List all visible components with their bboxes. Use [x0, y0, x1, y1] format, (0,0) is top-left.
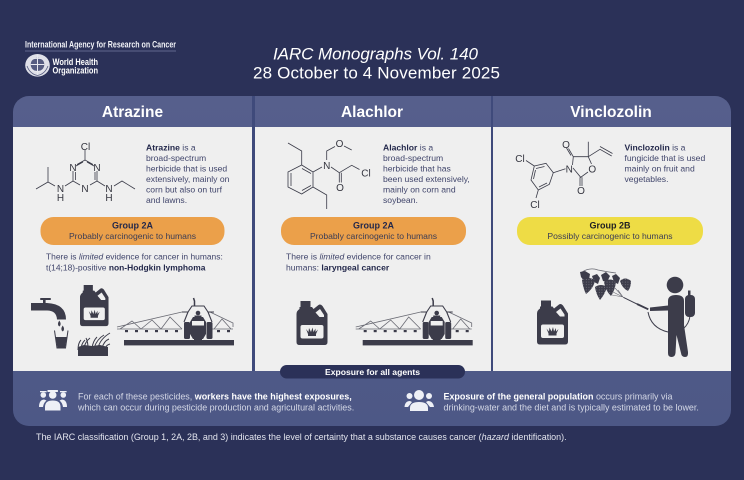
- icon: person spraying: [623, 277, 695, 357]
- heading: Atrazine: Atrazine: [102, 104, 163, 121]
- heading: Alachlor: Alachlor: [341, 104, 403, 121]
- chemical structure: Vinclozolin: O: [562, 140, 570, 151]
- text: Alachlor description: soybean.: [383, 195, 418, 205]
- text: Atrazine description: Atrazine is a: [146, 142, 196, 152]
- icon: tractor sprayer: [356, 298, 473, 345]
- text: Atrazine description: and lawns.: [146, 195, 187, 205]
- chemical structure: Vinclozolin: O: [577, 186, 585, 197]
- text: general population exposure: Exposure of the general population occurs primarily via: [444, 392, 672, 402]
- title: IARC Monographs Vol. 140: [273, 44, 479, 64]
- text: Atrazine description: corn but also on turf: [146, 184, 223, 194]
- icon: workers: [39, 390, 67, 410]
- text: workers exposure: which can occur during pesticide production and agricultural activities.: [77, 402, 354, 412]
- text: Atrazine description: herbicide that is used: [146, 164, 227, 174]
- WHO name: Organization: [52, 66, 98, 76]
- chemical structure: Atrazine: Cl: [81, 142, 90, 153]
- label: exposure for all agents: [280, 365, 465, 378]
- chemical structure: Atrazine: [36, 142, 135, 204]
- chemical structure: Atrazine: H: [57, 193, 64, 204]
- chemical structure: Vinclozolin: Cl: [515, 154, 525, 165]
- icon: herbicide jug: [537, 300, 568, 344]
- icon: grass: [78, 333, 110, 356]
- icon: herbicide jug: [296, 301, 328, 345]
- chemical structure: Alachlor: O: [336, 183, 344, 194]
- chemical structure: Atrazine: N: [69, 163, 77, 174]
- chemical structure: Alachlor: O: [336, 139, 344, 150]
- text: limited evidence: There is limited evidence for cancer in humans:: [46, 252, 223, 262]
- panel: Vinclozolin: [493, 104, 731, 371]
- label: exposure for all agents: Exposure for all agents: [325, 367, 420, 377]
- chemical structure: Vinclozolin: N: [566, 164, 573, 176]
- text: Vinclozolin description: mainly on fruit and: [624, 164, 695, 174]
- text: limited evidence: t(14;18)-positive non-Hodgkin lymphoma: [46, 262, 205, 272]
- text: Vinclozolin description: fungicide that is used: [624, 153, 705, 163]
- WHO name: World Health: [52, 57, 98, 67]
- text: limited evidence: There is limited evidence for cancer in: [286, 252, 431, 262]
- footer note: The IARC classification (Group 1, 2A, 2B, and 3) indicates the level of certainty that a substance causes cancer (hazard identification).: [36, 432, 567, 442]
- text: Alachlor description: broad-spectrum: [383, 153, 443, 163]
- icon: general population: [404, 390, 434, 411]
- chemical structure: Vinclozolin: Cl: [530, 200, 540, 211]
- chemical structure: Alachlor: Cl: [361, 168, 371, 180]
- group badge: Group 2B: Group 2B: [589, 220, 631, 230]
- group badge: Group 2B: Possibly carcinogenic to humans: [547, 231, 673, 241]
- chemical structure: Atrazine: N: [57, 184, 64, 195]
- chemical structure: Alachlor: N: [323, 161, 330, 172]
- chemical structure: Atrazine: H: [105, 193, 113, 204]
- group badge: Group 2A: Group 2A: [353, 220, 394, 230]
- panel: Atrazine: [13, 96, 255, 371]
- text: limited evidence: humans: laryngeal cancer: [286, 262, 389, 272]
- WHO name: [52, 57, 98, 76]
- group badge: Group 2A: [40, 217, 224, 245]
- icon: tractor sprayer: [117, 298, 234, 345]
- text: Vinclozolin description: Vinclozolin is a: [624, 142, 685, 152]
- title: [253, 44, 500, 82]
- title: 28 October to 4 November 2025: [253, 64, 500, 82]
- heading: Vinclozolin: Vinclozolin: [570, 104, 652, 121]
- icon: herbicide jug: [80, 285, 109, 326]
- chemical structure: Atrazine: N: [81, 184, 89, 195]
- chemical structure: Atrazine: N: [93, 163, 101, 174]
- panel: main background: [13, 96, 731, 426]
- icon: grapes: [580, 269, 631, 300]
- text: Alachlor description: herbicide that has: [383, 164, 451, 174]
- text: Vinclozolin description: vegetables.: [624, 174, 668, 184]
- text: general population exposure: drinking-water and the diet and is typically estimated to be lower.: [444, 402, 699, 412]
- group badge: Group 2A: [281, 217, 466, 245]
- group badge: Group 2B: [517, 217, 703, 245]
- text: Atrazine description: broad-spectrum: [146, 153, 206, 163]
- group badge: Group 2A: Probably carcinogenic to humans: [69, 231, 196, 241]
- chemical structure: Atrazine: N: [105, 184, 113, 195]
- IARC name: International Agency for Research on Cancer: [25, 40, 176, 50]
- chemical structure: Vinclozolin: [515, 140, 612, 211]
- panel: Alachlor: [255, 96, 493, 371]
- text: workers exposure: For each of these pesticides, workers have the highest exposures,: [78, 392, 352, 402]
- text: Atrazine description: extensively, mainly on: [146, 174, 230, 184]
- icon: WHO emblem: [25, 54, 50, 77]
- header: IARC and WHO logo: [25, 40, 176, 77]
- text: Alachlor description: been used extensively,: [383, 174, 470, 184]
- icon: tap with water drops: [31, 298, 68, 348]
- chemical structure: Vinclozolin: O: [588, 164, 596, 176]
- text: Alachlor description: mainly on corn and: [383, 184, 456, 194]
- group badge: Group 2A: Probably carcinogenic to humans: [310, 231, 437, 241]
- text: Alachlor description: Alachlor is a: [383, 142, 433, 152]
- chemical structure: Alachlor: [288, 139, 371, 209]
- group badge: Group 2A: Group 2A: [112, 220, 153, 230]
